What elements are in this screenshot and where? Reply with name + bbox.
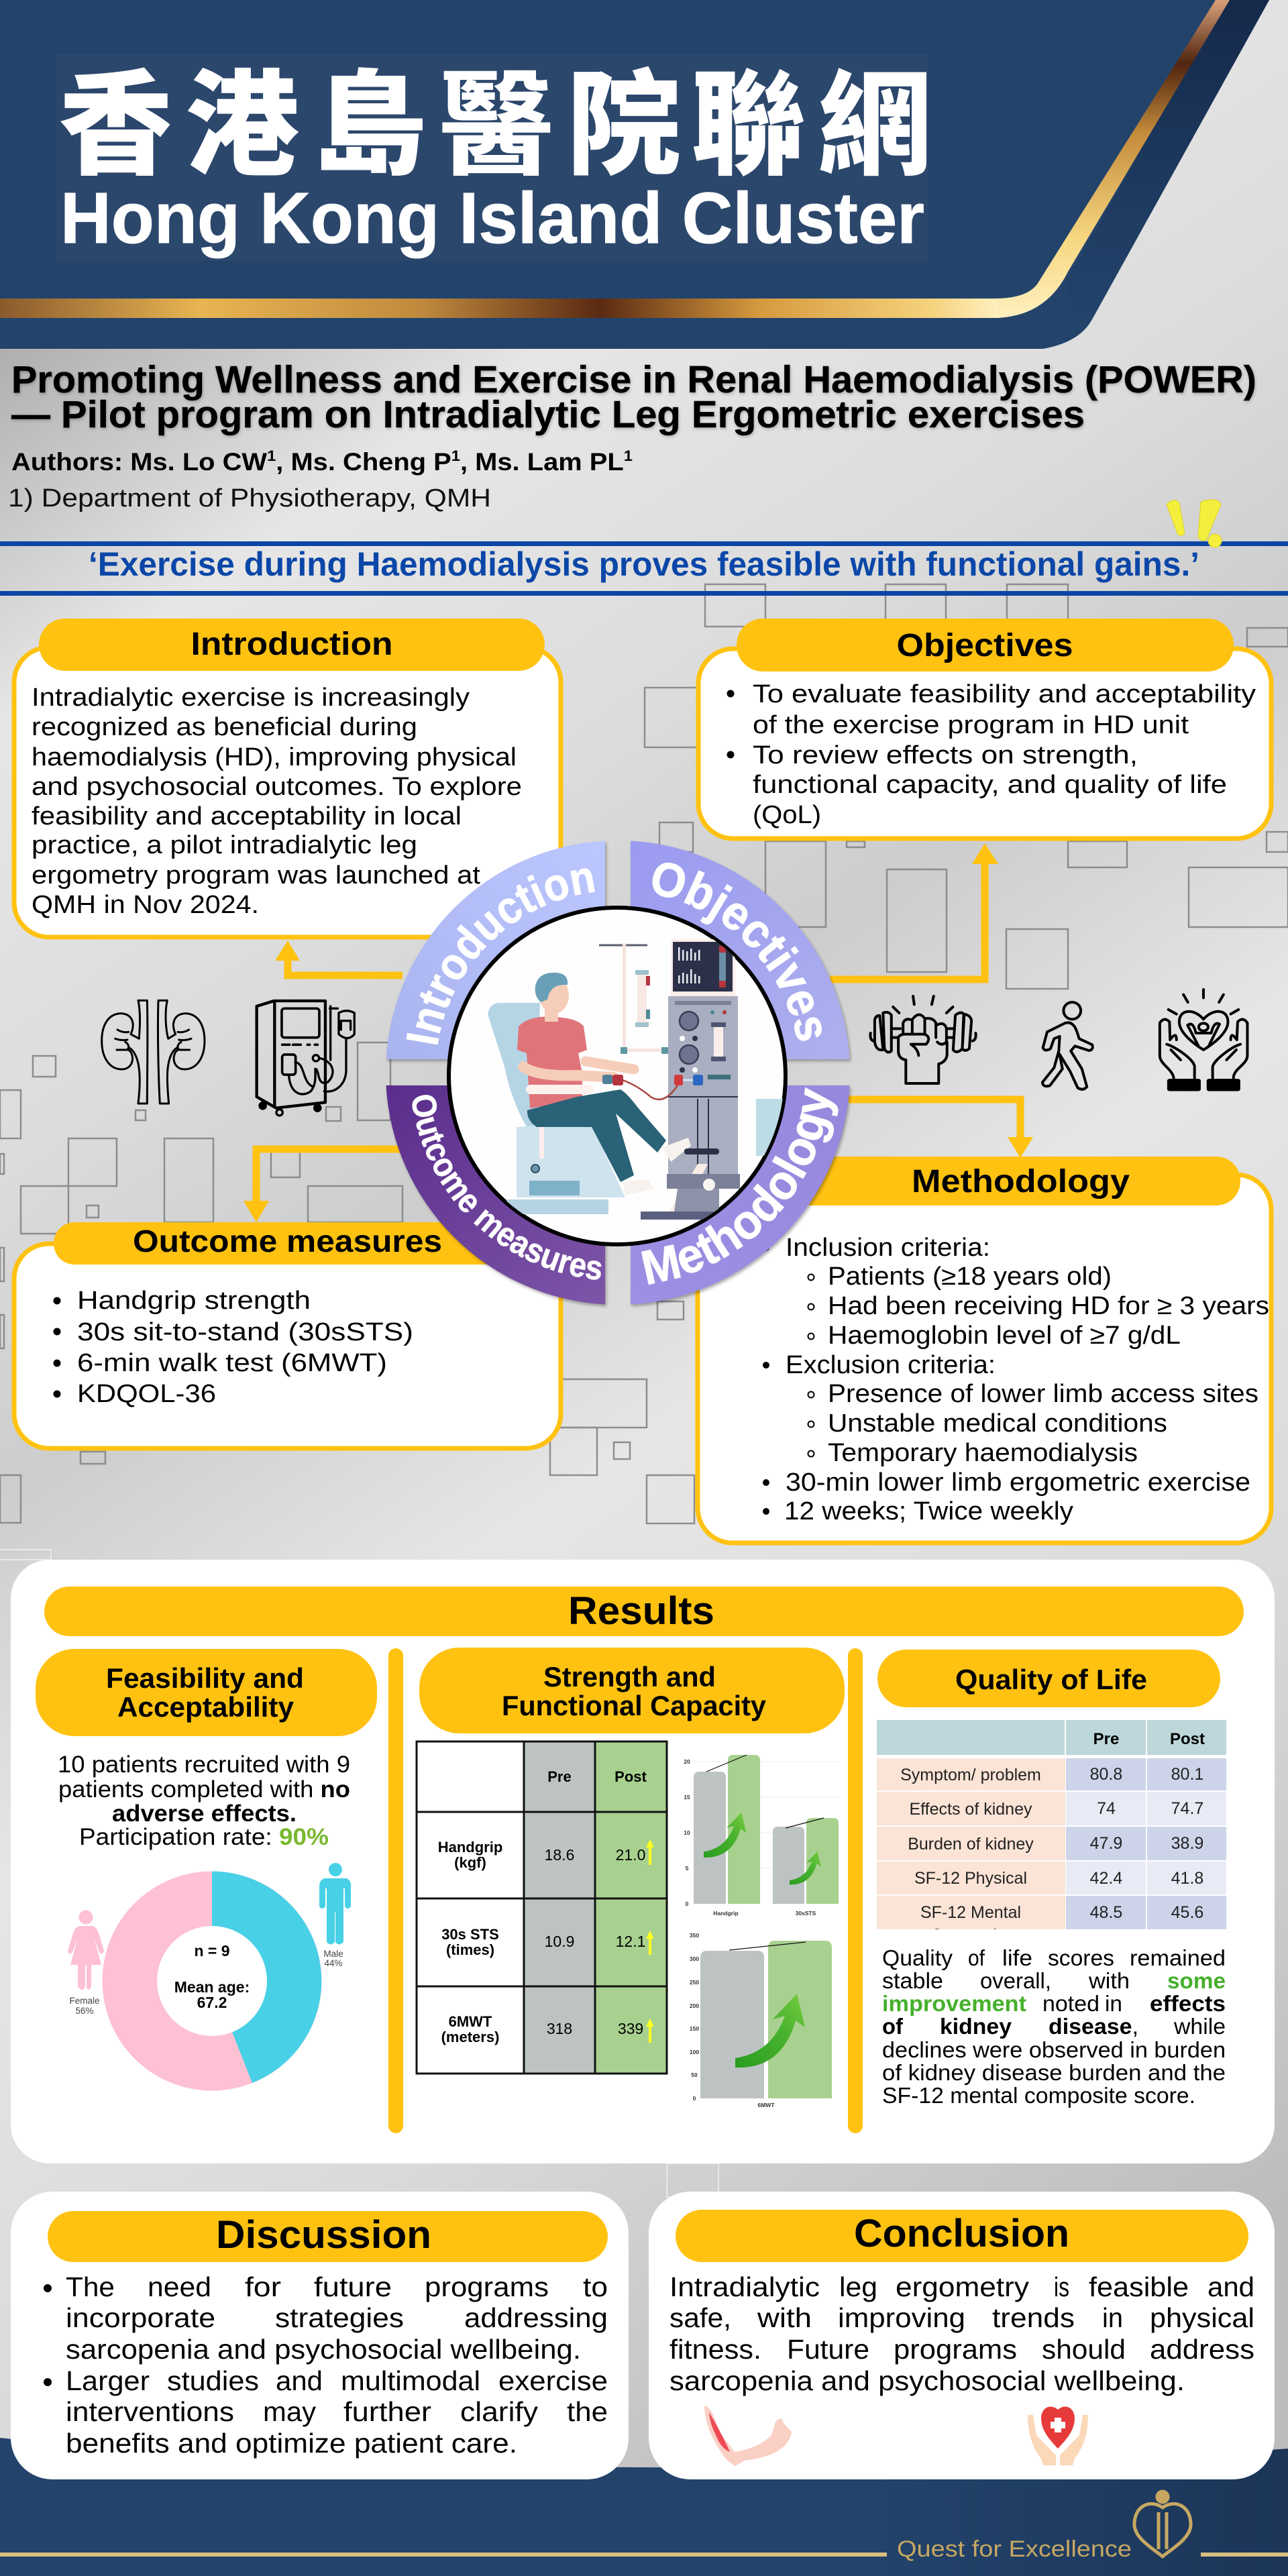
feasibility text: 10 patients recruited with 9 — [58, 1752, 350, 1778]
label: male 44%: 44% — [324, 1958, 343, 1968]
table: strength outcomes — [417, 1741, 667, 2074]
outcome list: 30s sit-to-stand (30sSTS) — [77, 1318, 413, 1346]
table: quality of life: disease — [942, 1823, 1000, 1841]
objectives list: To evaluate feasibility and acceptability — [753, 680, 1256, 708]
icon: dialysis machine — [257, 1001, 354, 1116]
discussion bullets: benefits and optimize patient care. — [66, 2428, 517, 2459]
heading: objectives: Objectives — [896, 628, 1073, 663]
table: quality of life: Composite — [930, 1926, 1011, 1945]
gold line horizontal part — [0, 299, 998, 318]
quality of life summary: of — [882, 2014, 904, 2039]
table: strength outcomes: 21.0 — [616, 1846, 645, 1864]
discussion bullets: studies — [167, 2365, 259, 2396]
heading: discussion: Discussion — [216, 2213, 431, 2257]
heading: discussion — [48, 2211, 608, 2262]
heading: methodology — [758, 1157, 1240, 1205]
methodology list: Patients (≥18 years old) — [828, 1263, 1112, 1291]
logo: heart person — [1134, 2491, 1191, 2557]
arrow: ring to outcome measures — [244, 1149, 402, 1222]
header band — [0, 0, 1269, 349]
table: strength outcomes: 18.6 — [545, 1846, 574, 1864]
discussion bullets: Larger — [66, 2365, 150, 2396]
panel: conclusion — [649, 2192, 1275, 2479]
introduction text: haemodialysis (HD), improving physical — [32, 743, 517, 771]
label: male 44% — [323, 1949, 343, 1968]
chinese title: 網 — [818, 33, 932, 198]
affiliation: 1) Department of Physiotherapy, QMH — [8, 484, 491, 513]
donut chart: gender: Mean age: — [174, 1978, 250, 1996]
icon: growth arrow 1 — [704, 1813, 746, 1858]
heading: quality of life: Quality of Life — [955, 1664, 1147, 1695]
icon: growth arrow 2 — [790, 1851, 821, 1884]
icon: kidneys — [102, 1000, 205, 1104]
bar chart: 6MWT: 6MWT — [757, 2102, 775, 2108]
bar chart: handgrip and 30sSTS: 15 — [684, 1794, 690, 1801]
quality of life summary: of — [968, 1945, 985, 1970]
conclusion text: improving — [838, 2302, 965, 2333]
panel: discussion — [11, 2192, 629, 2479]
methodology list: 30-min lower limb ergometric exercise — [786, 1468, 1250, 1497]
methodology list: Temporary haemodialysis — [828, 1439, 1138, 1467]
introduction text: Intradialytic exercise is increasingly — [32, 684, 470, 712]
table: strength outcomes: (kgf) — [454, 1854, 486, 1871]
icon: male figure — [319, 1863, 351, 1944]
ring segment: objectives: Objectives — [652, 863, 822, 1041]
feasibility text: Participation rate: 90% — [79, 1824, 329, 1850]
bar chart: 6MWT: 350 — [690, 1932, 699, 1939]
quality of life summary: overall, — [980, 1968, 1051, 1993]
heading: quality of life — [877, 1650, 1220, 1707]
table: quality of life: Symptom/ problem — [900, 1766, 1041, 1784]
shoes and ergometer — [623, 1138, 740, 1220]
donut chart: gender: 67.2 — [197, 1994, 227, 2011]
table: quality of life: Post — [1170, 1730, 1205, 1748]
discussion bullets: incorporate — [66, 2302, 215, 2333]
quality of life summary: declines were observed in burden — [882, 2037, 1226, 2062]
patient arm — [523, 1061, 634, 1089]
table: quality of life: Composite — [930, 1892, 1011, 1911]
panel: methodology — [698, 1157, 1271, 1543]
table: quality of life — [877, 1720, 1226, 1945]
bar chart: 6MWT: 150 — [690, 2025, 699, 2032]
introduction text — [32, 684, 522, 919]
methodology list: Presence of lower limb access sites — [828, 1380, 1258, 1408]
discussion bullets: the — [567, 2396, 608, 2427]
subpanel: strength and functional capacity — [417, 1648, 845, 2108]
table: strength outcomes: 10.9 — [545, 1933, 574, 1950]
background pattern of outlined squares — [0, 584, 1288, 1523]
table: strength outcomes: Handgrip — [438, 1839, 502, 1856]
methodology list: 12 weeks; Twice weekly — [784, 1497, 1073, 1525]
patient head and hair — [535, 973, 569, 1022]
takeaway banner — [0, 541, 1288, 596]
introduction text: feasibility and acceptability in local — [32, 802, 462, 830]
authors: 1 — [624, 447, 633, 464]
authors: , Ms. Cheng P — [276, 448, 451, 476]
header navy shape — [0, 0, 1269, 349]
heading: methodology: Methodology — [912, 1164, 1130, 1199]
conclusion text: feasible — [1089, 2271, 1189, 2302]
poster title — [11, 358, 1256, 436]
conclusion text: address — [1150, 2334, 1254, 2365]
quality of life summary — [882, 1945, 1226, 2108]
table: quality of life: Effects of kidney — [910, 1800, 1032, 1819]
heading: introduction: Introduction — [191, 627, 393, 662]
conclusion text: programs — [894, 2334, 1017, 2365]
conclusion text: fitness. — [669, 2334, 761, 2365]
heading: results — [44, 1587, 1244, 1636]
darker corner behind gold line — [1067, 0, 1269, 335]
conclusion text: in — [1102, 2302, 1123, 2333]
conclusion text: is — [1054, 2271, 1069, 2302]
objectives list — [727, 680, 1256, 829]
arrow: ring to methodology — [849, 1099, 1033, 1158]
conclusion text: leg — [839, 2271, 877, 2302]
poster title: Promoting Wellness and Exercise in Renal Haemodialysis (POWER) — [11, 358, 1256, 401]
panel: introduction — [14, 619, 561, 937]
arrow: ring to objectives — [830, 843, 998, 979]
table: quality of life: 80.8 — [1090, 1765, 1122, 1784]
footer band — [0, 2438, 1288, 2576]
quality of life summary: stable — [882, 1968, 943, 1993]
methodology list: Haemoglobin level of ≥7 g/dL — [828, 1322, 1181, 1350]
authors: , Ms. Lam PL — [460, 448, 624, 476]
conclusion text — [669, 2271, 1254, 2396]
bar chart: handgrip and 30sSTS: 0 — [686, 1900, 689, 1907]
methodology list: Exclusion criteria: — [786, 1351, 996, 1379]
discussion bullets: future — [314, 2271, 392, 2302]
quality of life summary: improvement — [882, 1991, 1026, 2016]
heading: strength: Functional Capacity — [502, 1690, 767, 1721]
discussion bullets: programs — [425, 2271, 549, 2302]
discussion bullets: addressing — [464, 2302, 608, 2333]
discussion bullets: clarify — [460, 2396, 539, 2427]
table: quality of life: Burden of kidney — [908, 1835, 1034, 1854]
discussion bullets: interventions — [66, 2396, 234, 2427]
icon: growth arrow 3 — [735, 1994, 805, 2068]
quality of life summary: life — [1002, 1945, 1032, 1970]
table: strength outcomes: 6MWT — [449, 2013, 492, 2030]
discussion bullets: The — [66, 2271, 115, 2302]
bar chart: 6MWT: 200 — [690, 2002, 699, 2009]
discussion bullets: need — [148, 2271, 211, 2302]
heading: outcome measures — [54, 1222, 564, 1265]
table: quality of life: 48.5 — [1090, 1903, 1122, 1922]
objectives list: functional capacity, and quality of life — [753, 771, 1227, 799]
outcome list: 6-min walk test (6MWT) — [77, 1349, 387, 1377]
quality of life summary: Quality — [882, 1945, 953, 1970]
title box — [56, 54, 928, 261]
heading: feasibility — [36, 1649, 377, 1736]
table: quality of life: 47.9 — [1090, 1834, 1122, 1853]
faint lower background lines — [0, 1550, 718, 2197]
side table — [756, 1099, 783, 1156]
methodology list — [763, 1234, 1269, 1525]
gold line vertical part — [994, 0, 1230, 318]
english title: Hong Kong Island Cluster — [60, 177, 924, 258]
table: strength outcomes: Pre — [547, 1768, 572, 1785]
table: quality of life: 38.9 — [1171, 1834, 1203, 1853]
patient shirt — [517, 1017, 587, 1108]
arrow: ring to introduction — [275, 941, 402, 975]
objectives list: (QoL) — [753, 801, 821, 829]
outcome list: Handgrip strength — [77, 1287, 311, 1315]
heading: results: Results — [568, 1589, 714, 1633]
conclusion text: trends — [992, 2302, 1075, 2333]
heading: outcome measures: Outcome measures — [133, 1224, 442, 1258]
quality of life summary: while — [1173, 2014, 1226, 2039]
heading: feasibility: Feasibility and — [106, 1662, 304, 1694]
methodology list: Unstable medical conditions — [828, 1409, 1167, 1438]
chinese title: 香 — [59, 33, 173, 198]
quality of life summary: kidney — [940, 2014, 1012, 2039]
chinese title: 聯 — [691, 33, 805, 198]
introduction text: and psychosocial outcomes. To explore — [32, 773, 522, 801]
icon: hands holding heart — [1160, 989, 1247, 1091]
poster title: — Pilot program on Intradialytic Leg Ergometric exercises — [11, 393, 1085, 436]
table: quality of life: 41.8 — [1171, 1869, 1203, 1888]
outcome list: KDQOL-36 — [77, 1380, 216, 1408]
ring segment: outcome measures: Outcome measures — [412, 1095, 602, 1280]
bar chart: handgrip and 30sSTS: 30sSTS — [796, 1910, 816, 1917]
patient trousers — [527, 1089, 666, 1182]
footer slogan: Quest for Excellence — [897, 2536, 1132, 2562]
takeaway text: ‘Exercise during Haemodialysis proves feasible with functional gains.’ — [89, 545, 1199, 583]
table: strength outcomes: 318 — [547, 2020, 572, 2037]
quality of life summary: effects — [1150, 1991, 1226, 2016]
blood lines — [602, 1075, 703, 1099]
conclusion text: Intradialytic — [669, 2271, 820, 2302]
table: quality of life: 45.6 — [1171, 1903, 1203, 1922]
heading: feasibility: Acceptability — [117, 1691, 294, 1723]
introduction text: QMH in Nov 2024. — [32, 891, 259, 919]
feasibility text — [58, 1752, 350, 1850]
subpanel: feasibility and acceptability — [36, 1649, 377, 2090]
conclusion text: and — [1208, 2271, 1254, 2302]
dialysis machine — [668, 939, 738, 1174]
quality of life summary: remained — [1130, 1945, 1226, 1970]
divider 1 — [388, 1648, 403, 2133]
table: strength outcomes: 339 — [618, 2020, 643, 2037]
discussion bullets: exercise — [498, 2365, 608, 2396]
feasibility text: patients completed with no — [58, 1776, 350, 1803]
subpanel: quality of life — [877, 1650, 1226, 2108]
donut chart: gender — [102, 1872, 322, 2090]
discussion bullets: multimodal — [341, 2365, 480, 2396]
quality of life summary: noted — [1042, 1991, 1099, 2016]
quality of life summary: of kidney disease burden and the — [882, 2060, 1226, 2085]
table: quality of life: SF-12 Physical — [914, 1869, 1027, 1888]
icon: yellow exclamation marks — [1167, 500, 1222, 547]
discussion bullets: may — [263, 2396, 316, 2427]
chinese title: 醫 — [439, 33, 553, 198]
bar chart: 6MWT: 50 — [691, 2072, 698, 2078]
bar chart: 6MWT: 0 — [693, 2095, 696, 2102]
discussion bullets — [44, 2271, 608, 2459]
bar chart: handgrip and 30sSTS: 10 — [684, 1829, 690, 1836]
chinese title: 港 — [185, 33, 299, 198]
table: strength outcomes: (times) — [446, 1941, 494, 1958]
table: strength outcomes: Post — [614, 1768, 647, 1785]
heading: introduction — [39, 619, 545, 671]
discussion bullets: strategies — [275, 2302, 404, 2333]
table: quality of life: 74 — [1097, 1799, 1116, 1818]
label: male 44%: Male — [323, 1949, 343, 1959]
outcome list — [54, 1287, 413, 1408]
dialysis chair — [488, 1003, 625, 1214]
methodology list: Had been receiving HD for ≥ 3 years — [828, 1292, 1269, 1320]
donut chart: gender: n = 9 — [194, 1942, 230, 1960]
conclusion text: ergometry — [896, 2271, 1030, 2302]
quality of life summary: disease, — [1049, 2014, 1138, 2039]
label: female 56% — [69, 1996, 100, 2016]
conclusion text: physical — [1150, 2302, 1254, 2333]
conclusion text: with — [757, 2302, 812, 2333]
quality of life summary: SF-12 mental composite score. — [882, 2083, 1195, 2108]
ring segment: introduction: Introduction — [407, 868, 595, 1045]
discussion bullets: sarcopenia and psychosocial wellbeing. — [66, 2334, 581, 2365]
objectives list: To review effects on strength, — [753, 741, 1138, 769]
bar chart: 6MWT: 250 — [690, 1979, 699, 1986]
divider 2 — [848, 1648, 863, 2133]
table: strength outcomes: 30s STS — [441, 1926, 499, 1943]
table: quality of life: disease — [942, 1858, 1000, 1876]
heading: objectives — [737, 619, 1234, 672]
chinese title: 島 — [313, 33, 427, 198]
conclusion text: sarcopenia and psychosocial wellbeing. — [669, 2365, 1185, 2396]
feasibility text: adverse effects. — [112, 1801, 297, 1827]
quality of life summary: some — [1167, 1968, 1226, 1993]
bar chart: handgrip and 30sSTS — [684, 1755, 840, 1917]
panel: outcome measures — [14, 1222, 564, 1448]
discussion bullets: for — [245, 2271, 281, 2302]
icon: female figure — [68, 1911, 104, 1990]
conclusion text: should — [1042, 2334, 1126, 2365]
panel: objectives — [698, 619, 1271, 839]
heading: strength: Strength and — [543, 1661, 716, 1693]
table: quality of life: 74.7 — [1171, 1799, 1203, 1818]
table: quality of life: SF-12 Mental — [920, 1903, 1021, 1922]
icon: arm muscle — [704, 2406, 792, 2466]
ring segment: methodology: Methodology — [641, 1087, 839, 1285]
discussion bullets: to — [583, 2271, 608, 2302]
discussion bullets: further — [343, 2396, 431, 2427]
icon: hands holding heart — [1028, 2407, 1088, 2465]
heading: conclusion: Conclusion — [854, 2212, 1069, 2255]
table: strength outcomes: (meters) — [441, 2029, 499, 2045]
label: female 56%: Female — [69, 1996, 100, 2006]
chinese title: 院 — [567, 33, 681, 198]
table: quality of life: 42.4 — [1090, 1869, 1122, 1888]
conclusion text: Future — [787, 2334, 869, 2365]
icon: walking person — [1042, 1002, 1093, 1089]
bar chart: 6MWT: 100 — [690, 2049, 699, 2055]
bar chart: handgrip and 30sSTS: 5 — [686, 1865, 689, 1872]
bar chart: handgrip and 30sSTS: 20 — [684, 1758, 690, 1765]
introduction text: recognized as beneficial during — [32, 713, 417, 741]
quality of life summary: in — [1105, 1991, 1122, 2016]
discussion bullets: and — [276, 2365, 323, 2396]
panel: results — [11, 1560, 1275, 2163]
table: quality of life: 80.1 — [1171, 1765, 1203, 1784]
methodology list: Inclusion criteria: — [786, 1234, 990, 1262]
authors: 1 — [451, 447, 460, 464]
icon: fist with dumbbell — [870, 996, 976, 1083]
footer gold line — [0, 2553, 1288, 2557]
central ring diagram — [386, 841, 852, 1308]
quality of life summary: scores — [1048, 1945, 1114, 1970]
introduction text: practice, a pilot intradialytic leg — [32, 831, 417, 859]
quality of life summary: with — [1088, 1968, 1130, 1993]
table: strength outcomes: 12.1 — [616, 1933, 645, 1950]
illustration: patient on intradialytic ergometer — [449, 908, 786, 1244]
iv pole and dialyser — [599, 943, 668, 1054]
conclusion text: safe, — [669, 2302, 731, 2333]
introduction text: ergometry program was launched at — [32, 861, 480, 890]
objectives list: of the exercise program in HD unit — [753, 711, 1189, 739]
bar chart: handgrip and 30sSTS: Handgrip — [713, 1910, 739, 1917]
authors: Authors: Ms. Lo CW — [11, 448, 249, 476]
heading: strength — [419, 1648, 845, 1733]
bar chart: 6MWT — [690, 1932, 832, 2108]
authors: 1 — [267, 447, 276, 464]
heading: conclusion — [676, 2210, 1248, 2262]
table: quality of life: Pre — [1093, 1730, 1119, 1748]
label: female 56%: 56% — [75, 2006, 94, 2016]
bar chart: 6MWT: 300 — [690, 1955, 699, 1962]
